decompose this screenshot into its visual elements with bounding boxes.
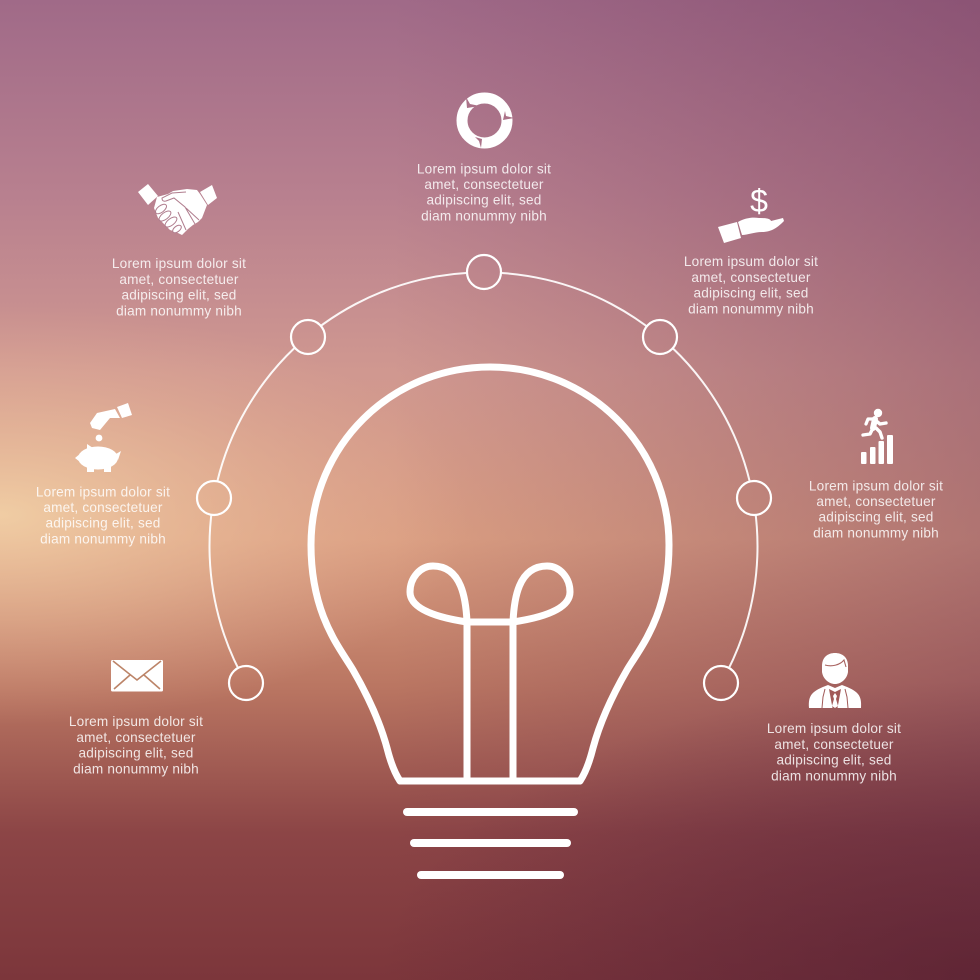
text: runner: amet, consectetuer (816, 494, 936, 509)
icon: hand with dollar: $ (750, 183, 768, 219)
text: envelope: Lorem ipsum dolor sit (69, 714, 203, 729)
light bulb (311, 367, 669, 875)
bulb screw base lines (407, 812, 574, 875)
text: top: diam nonummy nibh (421, 208, 547, 224)
text: piggy bank: diam nonummy nibh (40, 532, 166, 546)
text: runner: adipiscing elit, sed (818, 510, 934, 524)
text: businessman: diam nonummy nibh (771, 768, 897, 784)
text: runner: Lorem ipsum dolor sit (809, 478, 943, 494)
text: handshake: diam nonummy nibh (116, 304, 242, 318)
text: top: Lorem ipsum dolor sit (417, 162, 551, 176)
icon: runner on bars (861, 409, 893, 464)
icon: handshake (138, 184, 217, 235)
text: runner: diam nonummy nibh (813, 526, 939, 540)
icon: piggy bank with hand (75, 403, 132, 472)
text: top: amet, consectetuer (424, 177, 544, 192)
text: piggy bank: amet, consectetuer (43, 500, 163, 515)
text: envelope: amet, consectetuer (76, 730, 196, 745)
text: dollar: amet, consectetuer (691, 270, 811, 285)
text: piggy bank: Lorem ipsum dolor sit (36, 484, 170, 500)
text: businessman: adipiscing elit, sed (776, 752, 892, 768)
text: handshake: Lorem ipsum dolor sit (112, 256, 246, 271)
icon: hand with dollar (718, 183, 784, 243)
icon: refresh arrows (462, 97, 514, 148)
icon: businessman (809, 653, 861, 708)
text: handshake: amet, consectetuer (119, 272, 239, 287)
text: piggy bank: adipiscing elit, sed (45, 516, 161, 530)
arc with nodes (197, 255, 771, 700)
icon: envelope (111, 660, 163, 692)
text: dollar: Lorem ipsum dolor sit (684, 254, 818, 269)
text: businessman: Lorem ipsum dolor sit (767, 721, 901, 736)
text: businessman: amet, consectetuer (774, 737, 894, 752)
text: handshake: adipiscing elit, sed (121, 288, 237, 302)
text: dollar: adipiscing elit, sed (693, 286, 809, 300)
text: envelope: adipiscing elit, sed (78, 746, 194, 760)
text: dollar: diam nonummy nibh (688, 302, 814, 316)
text: envelope: diam nonummy nibh (73, 762, 199, 776)
text: top: adipiscing elit, sed (426, 192, 542, 208)
